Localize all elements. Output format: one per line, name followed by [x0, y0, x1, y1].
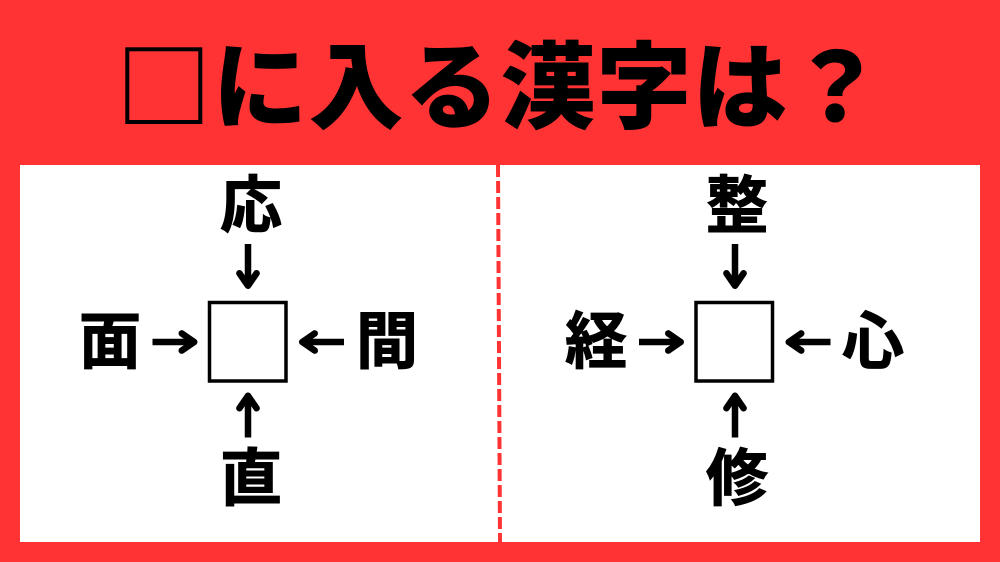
- arrow: left: [152, 333, 195, 351]
- arrow: right: [788, 333, 830, 351]
- left kanji: 経: [565, 308, 627, 377]
- arrow: left: [639, 333, 682, 351]
- right kanji: 心: [842, 308, 904, 377]
- top kanji: 応: [220, 172, 282, 241]
- arrow: right: [302, 333, 344, 351]
- top kanji: 整: [706, 172, 768, 241]
- blank box: [696, 302, 772, 381]
- arrow: bottom: [726, 395, 744, 438]
- panel: white puzzle area: [20, 165, 980, 542]
- dashed divider: [498, 165, 500, 542]
- right kanji: 間: [356, 308, 418, 377]
- arrow: bottom: [239, 395, 257, 438]
- panel: left puzzle: [79, 172, 418, 514]
- title text: に入る漢字は？: [212, 36, 884, 142]
- left kanji: 面: [79, 308, 141, 377]
- title blank square: [127, 49, 200, 122]
- bottom kanji: 修: [706, 445, 768, 514]
- arrow: top: [239, 244, 257, 286]
- panel: right puzzle: [565, 172, 904, 514]
- arrow: top: [726, 244, 744, 286]
- bottom kanji: 直: [220, 445, 282, 514]
- blank box: [210, 302, 286, 381]
- title: [127, 36, 884, 142]
